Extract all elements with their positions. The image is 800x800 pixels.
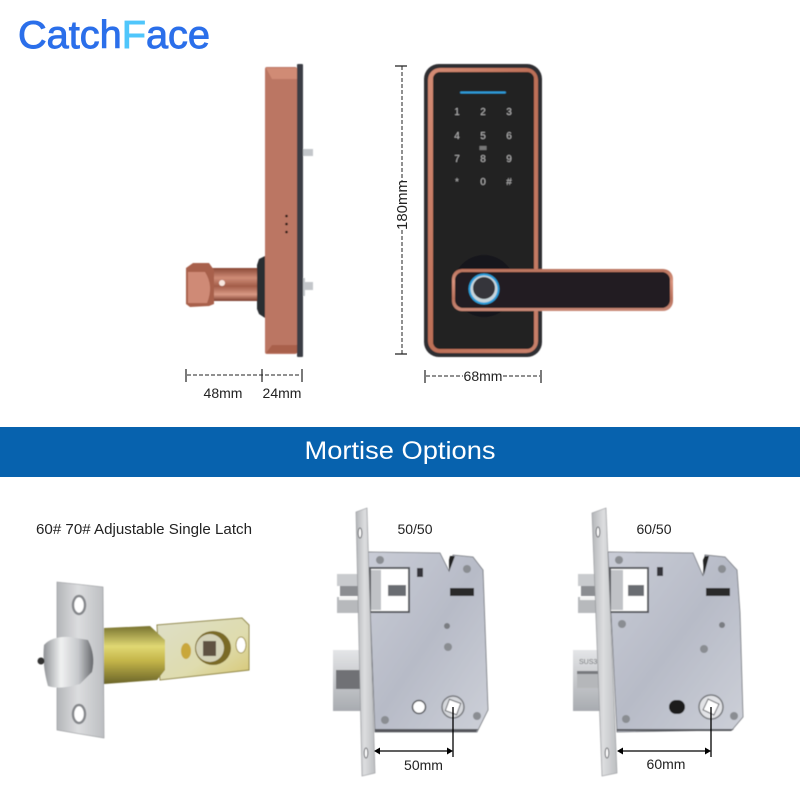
keypad digits: 7 xyxy=(454,154,460,165)
latch face plate xyxy=(57,582,104,738)
side mounting pins xyxy=(303,149,313,296)
keypad digits: 1 xyxy=(454,107,460,118)
50/50 case xyxy=(368,552,488,732)
dimension: 50mm: 50mm xyxy=(404,757,443,773)
front black panel xyxy=(433,72,534,349)
60/50 spindle hole xyxy=(699,695,723,719)
50/50 slots and screws xyxy=(376,556,481,724)
heading: adjustable single latch: 60# 70# Adjustable Single Latch xyxy=(36,522,252,538)
LED indicator bar xyxy=(460,92,506,94)
dimension: 68mm: 68mm xyxy=(464,368,502,384)
60/50 dead bolt xyxy=(573,650,609,711)
keypad digits: 4 xyxy=(454,131,460,142)
50/50 face plate holes xyxy=(358,528,368,758)
latch cylinder xyxy=(104,626,165,684)
logo: CatchFace: CatchFace xyxy=(18,14,210,57)
keypad digits: 5 xyxy=(480,131,486,142)
label: 50/50: 50/50 xyxy=(397,521,433,537)
dimension: 60mm: 60mm xyxy=(647,756,685,772)
mortise 50/50 xyxy=(333,508,488,776)
50/50 spring window xyxy=(370,568,409,612)
keypad digits: 3 xyxy=(506,107,512,118)
latch housing xyxy=(157,618,249,680)
banner: Mortise Options xyxy=(0,427,800,477)
fingerprint sensor xyxy=(468,274,500,304)
lever handle xyxy=(452,269,673,311)
side view of lock xyxy=(186,64,313,357)
60/50 face plate holes xyxy=(596,527,609,758)
keypad digits: 6 xyxy=(506,131,512,142)
latch screw holes xyxy=(73,596,85,723)
front outer shell xyxy=(424,64,542,357)
banner: Mortise Options: Mortise Options xyxy=(304,437,496,465)
dimension: 50mm xyxy=(374,707,453,773)
60/50 case xyxy=(608,552,743,732)
side speaker holes xyxy=(285,215,288,233)
keypad digits: * xyxy=(455,177,459,188)
keypad digits: 8 xyxy=(480,154,486,165)
latch knob xyxy=(44,637,93,688)
latch square slot xyxy=(181,631,246,665)
latch illustration xyxy=(38,582,249,738)
60/50 latch bolt xyxy=(578,574,604,613)
keypad digits xyxy=(454,107,512,188)
front view of lock xyxy=(424,64,673,357)
60/50 spring window xyxy=(610,568,648,612)
dimension: 68mm xyxy=(425,368,541,384)
dimension: 180mm: 180mm xyxy=(394,180,411,230)
side handle head xyxy=(186,263,214,307)
handle rose xyxy=(453,255,515,317)
label: 60/50: 60/50 xyxy=(636,521,672,537)
dimension: 48mm and 24mm: 48mm xyxy=(204,385,242,401)
60/50 face plate xyxy=(592,508,617,776)
keypad digits: 9 xyxy=(506,154,512,165)
keypad digits: 2 xyxy=(480,107,486,118)
side handle shaft xyxy=(212,268,257,301)
mortise 60/50 xyxy=(573,508,743,776)
side back plate xyxy=(297,64,303,357)
dimension: 180mm xyxy=(394,66,411,354)
side rose collar xyxy=(257,256,265,318)
side copper body xyxy=(265,67,297,354)
front copper trim xyxy=(428,68,538,353)
50/50 latch bolt xyxy=(337,574,361,613)
50/50 face plate xyxy=(356,508,375,776)
dimension: 48mm and 24mm: 24mm xyxy=(263,385,301,401)
50/50 spindle hole xyxy=(442,696,464,718)
dimension: 60mm xyxy=(617,707,711,772)
60/50 dead bolt: SUS304 xyxy=(579,659,605,666)
50/50 dead bolt xyxy=(333,650,366,711)
keypad digits: # xyxy=(506,177,512,188)
keypad digits: 0 xyxy=(480,177,486,188)
card reader icon xyxy=(480,146,486,150)
dimension: 48mm and 24mm xyxy=(186,369,302,401)
60/50 slots and screws xyxy=(615,556,738,723)
